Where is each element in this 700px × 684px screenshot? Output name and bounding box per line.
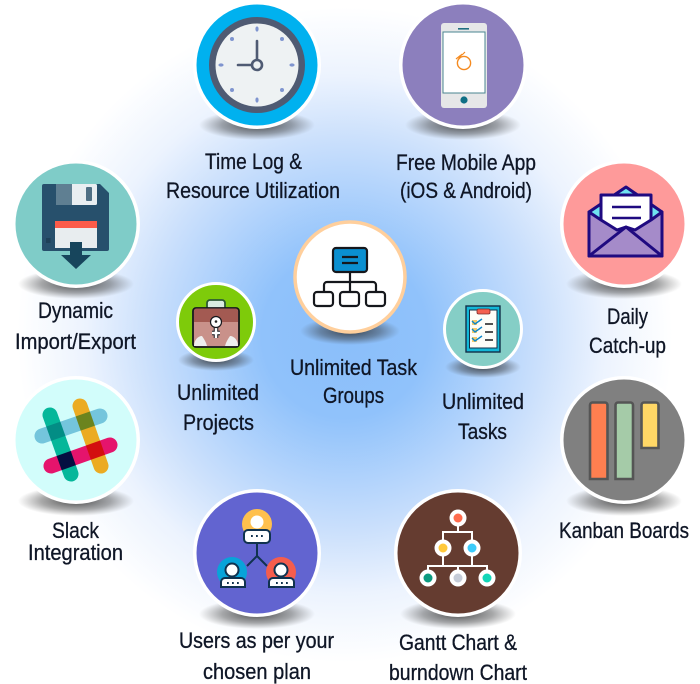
panel: tasks	[442, 290, 524, 444]
panel: projects	[177, 284, 259, 435]
icon: phone	[441, 23, 487, 108]
icon: hierarchy	[420, 510, 496, 586]
panel: mobile app	[396, 1, 536, 203]
icon: task tree	[314, 248, 385, 306]
panel: import export	[12, 160, 140, 354]
label: time log: Resource Utilization	[166, 178, 340, 203]
label: tasks: Unlimited	[442, 389, 524, 414]
label: import export	[15, 298, 136, 354]
label: projects: Unlimited	[177, 380, 259, 405]
icon: clock	[209, 17, 305, 113]
label: tasks: Tasks	[458, 419, 507, 444]
panel: task groups	[290, 222, 418, 408]
label: users: chosen plan	[203, 659, 311, 684]
label: import export: Dynamic	[38, 298, 113, 323]
icon: briefcase	[193, 300, 239, 347]
panel: time log	[166, 1, 340, 203]
label: daily catch-up	[589, 304, 666, 358]
label: import export: Import/Export	[15, 329, 136, 354]
label: slack	[28, 518, 123, 565]
label: daily catch-up: Daily	[607, 304, 648, 329]
label: task groups	[290, 355, 418, 408]
icon: user network	[217, 509, 296, 587]
label: task groups: Groups	[323, 383, 384, 408]
label: users: Users as per your	[179, 628, 334, 653]
label: projects: Projects	[183, 410, 254, 435]
label: gantt chart	[389, 630, 527, 684]
label: projects	[177, 380, 259, 435]
icon: clipboard	[466, 306, 500, 352]
panel: slack	[12, 376, 140, 565]
label: tasks	[442, 389, 524, 444]
label: task groups: Unlimited Task	[290, 355, 418, 380]
label: slack: Integration	[28, 540, 123, 565]
label: daily catch-up: Catch-up	[589, 333, 666, 358]
icon: floppy disk	[42, 184, 109, 269]
label: gantt chart: Gantt Chart &	[399, 630, 517, 655]
label: time log	[166, 149, 340, 203]
icon: envelope	[589, 187, 662, 256]
panel: daily catch-up	[560, 160, 688, 358]
panel: gantt chart	[389, 489, 527, 684]
label: mobile app: Free Mobile App	[396, 150, 536, 175]
label: slack: Slack	[52, 518, 100, 543]
label: mobile app: (iOS & Android)	[400, 178, 532, 203]
icon: slack hash	[42, 406, 110, 474]
label: time log: Time Log &	[205, 149, 302, 174]
panel: kanban	[559, 376, 689, 543]
label: mobile app	[396, 150, 536, 203]
panel: users	[179, 489, 334, 684]
label: users	[179, 628, 334, 684]
icon: kanban columns	[590, 402, 658, 479]
